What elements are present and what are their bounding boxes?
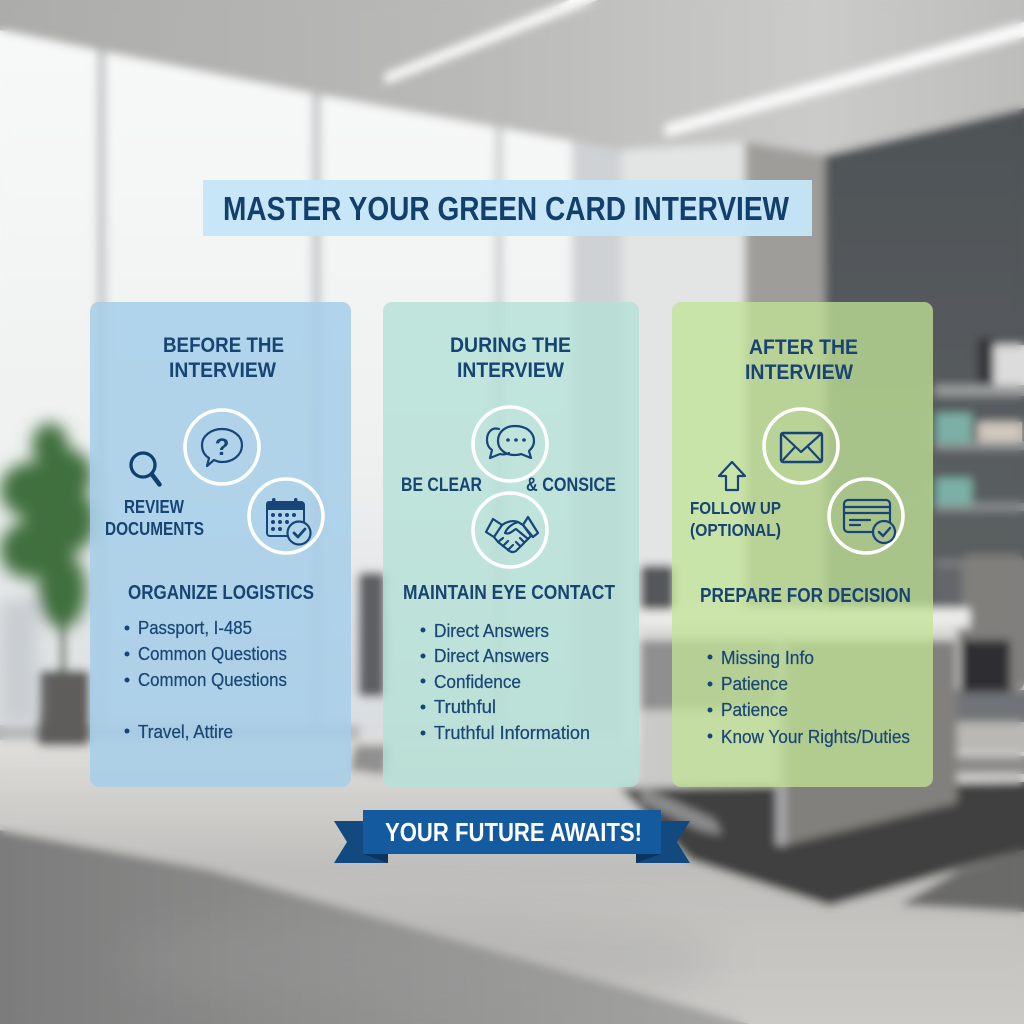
title banner [203, 180, 812, 236]
label: follow up optional: (OPTIONAL) [690, 520, 781, 540]
icon: envelope [764, 409, 838, 483]
checklist: after: Patience [721, 674, 788, 694]
ribbon banner: your future awaits: YOUR FUTURE AWAITS! [385, 817, 642, 847]
checklist: after [708, 648, 910, 747]
label: review documents [105, 497, 204, 539]
label: be clear: BE CLEAR [401, 475, 482, 496]
subheading: maintain eye contact: MAINTAIN EYE CONTACT [403, 581, 615, 604]
icon: magnifying glass [131, 453, 160, 484]
label: follow up optional: FOLLOW UP [690, 498, 781, 518]
checklist: before: Common Questions [138, 644, 287, 664]
heading: during the interview: DURING THE [450, 334, 571, 357]
icon: question speech bubble: ? [215, 434, 229, 461]
icon: card with check [829, 479, 903, 553]
heading: after the interview: INTERVIEW [745, 361, 853, 384]
heading: before the interview: INTERVIEW [169, 359, 276, 382]
icon: calendar with check [249, 479, 323, 553]
checklist: during: Direct Answers [434, 646, 549, 666]
label: and consice: & CONSICE [526, 475, 616, 496]
heading: during the interview: INTERVIEW [457, 359, 564, 382]
label: review documents: REVIEW [124, 497, 184, 517]
panel: before the interview [90, 302, 351, 787]
checklist: after: Missing Info [721, 648, 814, 668]
heading: after the interview: AFTER THE [749, 336, 858, 359]
checklist: before [124, 618, 287, 742]
checklist: during: Truthful [434, 697, 496, 717]
subheading: organize logistics: ORGANIZE LOGISTICS [128, 581, 314, 604]
label: review documents: DOCUMENTS [105, 519, 204, 539]
checklist: before: Passport, I-485 [138, 618, 252, 638]
checklist: during: Direct Answers [434, 621, 549, 641]
checklist: after: Patience [721, 700, 788, 720]
heading: before the interview: BEFORE THE [163, 334, 284, 357]
icon: question speech bubble [185, 410, 259, 484]
icon: handshake [473, 493, 547, 567]
checklist: during: Confidence [434, 672, 521, 692]
label: follow up optional [690, 498, 781, 540]
checklist: before: Travel, Attire [138, 722, 233, 742]
heading: after the interview [745, 336, 858, 384]
heading: before the interview [163, 334, 284, 382]
checklist: after: Know Your Rights/Duties [721, 727, 910, 747]
panel: during the interview [383, 302, 639, 787]
icon: chat bubbles [473, 407, 547, 481]
title banner: MASTER YOUR GREEN CARD INTERVIEW [223, 190, 790, 227]
icon: up arrow [719, 462, 745, 490]
checklist: during: Truthful Information [434, 723, 590, 743]
subheading: prepare for decision: PREPARE FOR DECISION [700, 584, 911, 607]
heading: during the interview [450, 334, 571, 382]
ribbon banner: your future awaits [334, 810, 690, 863]
panel: after the interview [672, 302, 933, 787]
checklist: before: Common Questions [138, 670, 287, 690]
checklist: during [420, 621, 590, 743]
